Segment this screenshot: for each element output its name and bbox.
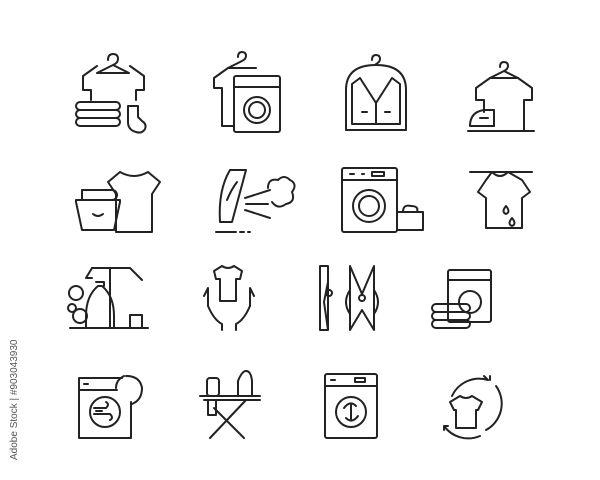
icon: ironing board: [200, 371, 260, 438]
icon: shirt recycle: [444, 376, 502, 438]
icon: shirt with folded clothes and socks: [76, 54, 146, 133]
icon: dryer machine: [79, 376, 142, 438]
icon: steam iron: [216, 170, 295, 232]
icon: clothespins: [320, 266, 378, 330]
icon: washing machine with towels: [432, 270, 491, 328]
icon: detergent and box: [68, 268, 148, 328]
icon: wet shirt on line: [470, 172, 532, 228]
icon: washing machine spin: [325, 374, 377, 438]
icon: washing machine with basin: [342, 168, 423, 232]
icon: hands holding shirt: [204, 266, 254, 330]
icon: shirt with iron: [468, 62, 534, 131]
icon: laundry basket with shirt: [76, 172, 160, 232]
watermark: Adobe Stock | #903043930: [9, 339, 20, 460]
icon: suit in garment bag: [346, 55, 406, 130]
icon: shirt and washing machine: [214, 52, 280, 132]
